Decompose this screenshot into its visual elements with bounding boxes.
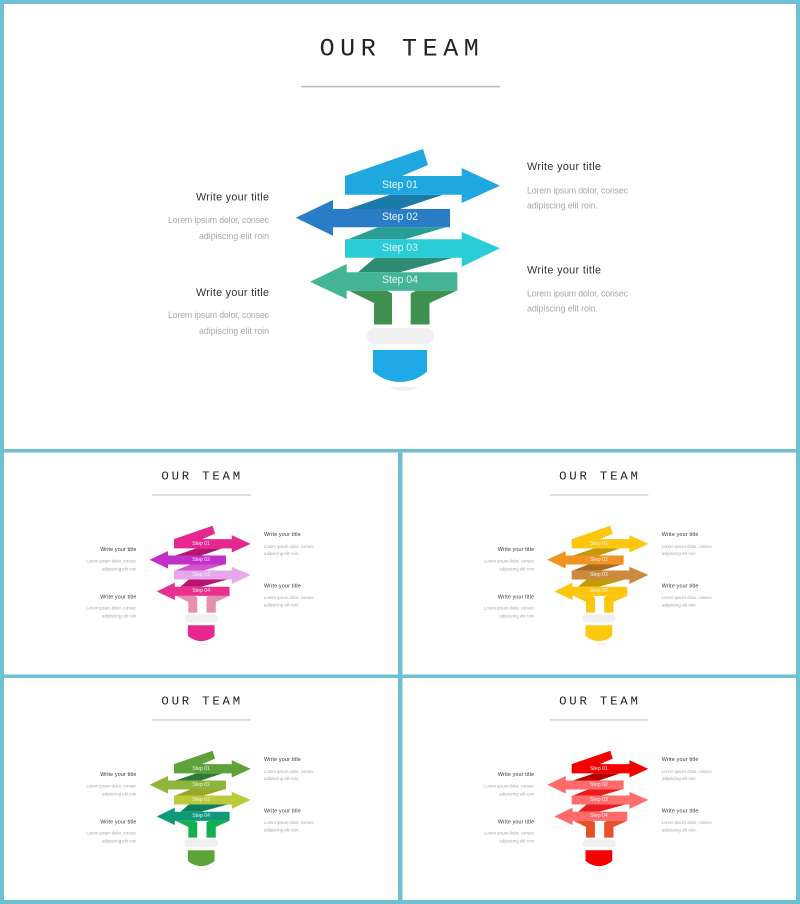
text block: right top: Write your title — [527, 161, 601, 173]
text blocks: Write your title — [662, 583, 698, 589]
text blocks — [86, 757, 315, 843]
text blocks: Lorem ipsum dolor, consec — [264, 820, 315, 825]
lightbulb arrows: Step 01 — [590, 766, 608, 772]
lightbulb arrows: Step 04 — [192, 588, 210, 594]
arrow: step 03 — [345, 232, 500, 267]
lightbulb arrows: Step 03 — [590, 572, 608, 578]
text block: left top — [168, 192, 270, 241]
text block: left bottom — [168, 287, 270, 336]
arrow: step 02 — [296, 200, 450, 236]
text blocks — [484, 757, 713, 843]
lightbulb arrows: Step 01 — [590, 541, 608, 547]
lightbulb arrows: Step 01 — [192, 541, 210, 547]
text blocks: Write your title — [100, 547, 136, 553]
lightbulb arrows: Step 03 — [192, 797, 210, 803]
lightbulb arrows — [547, 526, 648, 600]
text block: right bottom: Write your title — [527, 264, 601, 276]
text blocks: Lorem ipsum dolor, consec — [264, 544, 315, 549]
text blocks: Lorem ipsum dolor, consec — [662, 820, 713, 825]
title: OUR TEAM — [559, 694, 641, 708]
lightbulb arrows: Step 03 — [590, 797, 608, 803]
text blocks: Lorem ipsum dolor, consec — [86, 830, 137, 835]
bulb base — [176, 821, 229, 870]
text blocks: Lorem ipsum dolor, consec — [86, 605, 137, 610]
text block: right bottom: adipiscing elit roin. — [527, 304, 598, 314]
text blocks: Lorem ipsum dolor, consec — [264, 595, 315, 600]
text block: left top: Write your title — [196, 192, 269, 204]
text blocks: Lorem ipsum dolor, consec — [484, 558, 535, 563]
text blocks: Write your title — [662, 808, 698, 814]
text blocks: Lorem ipsum dolor, consec — [484, 783, 535, 788]
arrow: step 01: Step 01 — [382, 179, 418, 191]
text blocks: adipiscing elit roin — [102, 838, 137, 843]
title: OUR TEAM — [559, 469, 641, 483]
lightbulb arrows: Step 02 — [590, 557, 608, 563]
text blocks: adipiscing elit roin. — [264, 827, 299, 832]
bulb base — [574, 821, 627, 870]
text blocks: Write your title — [264, 757, 301, 763]
lightbulb arrows — [547, 751, 648, 825]
text blocks: Write your title — [100, 820, 136, 826]
panel: green slide — [4, 678, 398, 900]
arrow: step 02: Step 02 — [382, 211, 418, 223]
text blocks: Write your title — [100, 595, 136, 601]
text blocks: Lorem ipsum dolor, consec — [662, 544, 713, 549]
text blocks: Write your title — [264, 583, 301, 589]
lightbulb arrows: Step 02 — [192, 782, 210, 788]
lightbulb arrows: Step 04 — [590, 813, 608, 819]
text block: left bottom: Write your title — [196, 287, 269, 299]
text block: left top: adipiscing elit roin — [199, 231, 269, 241]
text blocks: adipiscing elit roin — [102, 613, 137, 618]
text blocks: adipiscing elit roin. — [662, 776, 697, 781]
text blocks: Write your title — [662, 532, 698, 538]
text block: left bottom: adipiscing elit roin — [199, 326, 269, 336]
text blocks: adipiscing elit roin — [499, 613, 535, 618]
text blocks: Write your title — [100, 772, 136, 778]
text blocks: adipiscing elit roin — [499, 791, 535, 796]
lightbulb arrows: Step 02 — [192, 557, 210, 563]
panel: red slide — [402, 678, 796, 900]
panel: yellow slide — [402, 452, 796, 674]
text blocks: adipiscing elit roin — [102, 566, 137, 571]
text blocks: adipiscing elit roin. — [264, 551, 299, 556]
text blocks: adipiscing elit roin — [499, 838, 535, 843]
text blocks: Lorem ipsum dolor, consec — [662, 595, 713, 600]
bulb base — [349, 291, 457, 391]
text blocks: adipiscing elit roin — [499, 566, 535, 571]
text blocks: Lorem ipsum dolor, consec — [484, 605, 535, 610]
text blocks: adipiscing elit roin. — [662, 551, 697, 556]
text blocks: adipiscing elit roin — [102, 791, 137, 796]
text block: right top — [527, 161, 629, 210]
title: OUR TEAM — [320, 34, 484, 64]
lightbulb arrows: Step 04 — [590, 588, 608, 594]
text blocks — [86, 532, 315, 618]
text blocks: Write your title — [498, 772, 534, 778]
text blocks: adipiscing elit roin. — [264, 776, 299, 781]
text blocks: Write your title — [264, 532, 301, 538]
arrow: step 01 — [345, 149, 500, 203]
text block: right bottom — [527, 264, 629, 314]
text blocks: adipiscing elit roin. — [662, 602, 697, 607]
lightbulb arrows: Step 04 — [192, 813, 210, 819]
text block: right top: adipiscing elit roin. — [527, 200, 598, 210]
text blocks: Write your title — [662, 757, 698, 763]
text block: left top: Lorem ipsum dolor, consec — [168, 215, 270, 225]
text blocks — [484, 532, 713, 618]
lightbulb arrows: Step 02 — [590, 782, 608, 788]
lightbulb arrows — [150, 751, 251, 825]
title: OUR TEAM — [161, 469, 243, 483]
arrow: step 03: Step 03 — [382, 242, 418, 254]
lightbulb arrows — [150, 526, 251, 600]
text blocks: Lorem ipsum dolor, consec — [86, 783, 137, 788]
text block: right bottom: Lorem ipsum dolor, consec — [527, 289, 629, 299]
text blocks: Lorem ipsum dolor, consec — [86, 558, 137, 563]
arrow: step 04: Step 04 — [382, 274, 418, 286]
bulb base — [574, 596, 627, 645]
arrow: step 04 — [310, 264, 457, 299]
title: OUR TEAM — [161, 694, 243, 708]
lightbulb arrows: Step 01 — [192, 766, 210, 772]
text blocks: Write your title — [498, 820, 534, 826]
panel: pink slide — [4, 452, 398, 674]
text block: left bottom: Lorem ipsum dolor, consec — [168, 310, 270, 320]
text blocks: Write your title — [498, 595, 534, 601]
text block: right top: Lorem ipsum dolor, consec — [527, 186, 629, 196]
text blocks: Lorem ipsum dolor, consec — [264, 769, 315, 774]
lightbulb arrows — [296, 149, 500, 299]
panel: main blue slide — [4, 4, 796, 449]
text blocks: adipiscing elit roin. — [662, 827, 697, 832]
text blocks: Lorem ipsum dolor, consec — [484, 830, 535, 835]
text blocks: Write your title — [264, 808, 301, 814]
text blocks: Lorem ipsum dolor, consec — [662, 769, 713, 774]
text blocks: Write your title — [498, 547, 534, 553]
bulb base — [176, 596, 229, 645]
lightbulb arrows: Step 03 — [192, 572, 210, 578]
text blocks: adipiscing elit roin. — [264, 602, 299, 607]
